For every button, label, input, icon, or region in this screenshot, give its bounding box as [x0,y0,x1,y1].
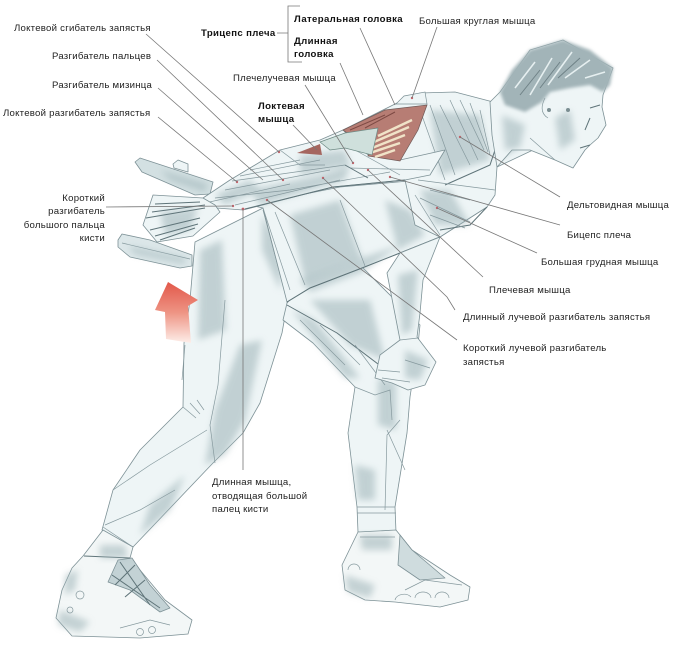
hand gripping dumbbell [143,195,220,242]
labels: right side: запястья [463,357,505,368]
labels: left side: Локтевой разгибатель запястья [3,108,150,119]
labels: top centre: мышца [258,114,295,125]
labels: left side: Локтевой сгибатель запястья [14,23,151,34]
raised arm and forearm [203,130,445,210]
rear shoe [56,530,192,638]
labels: left side: Короткий [62,193,105,204]
rear leg [102,208,290,547]
labels: triceps group: Длинная [294,36,338,47]
labels: right side: Плечевая мышца [489,285,571,296]
labels: left side: большого пальца [24,220,105,231]
front shoe [342,530,470,607]
labels: top centre: Локтевая [258,101,305,112]
supporting arm and hand [375,237,440,390]
labels: triceps group: головка [294,49,334,60]
triceps muscle highlighted in red [297,105,427,161]
labels: top centre [233,16,536,125]
labels: top centre: Большая круглая мышца [419,16,536,27]
icon: lower dumbbell plate [118,234,192,268]
labels: right side: Длинный лучевой разгибатель запястья [463,312,650,323]
label: long abductor of thumb: Длинная мышца, [212,477,291,488]
labels: right side: Большая грудная мышца [541,257,659,268]
labels: triceps group [201,14,403,60]
labels: left side: разгибатель [48,206,105,217]
labels: right side: Короткий лучевой разгибатель [463,343,607,354]
small red muscle markers [232,97,461,210]
labels: top centre: Плечелучевая мышца [233,73,336,84]
labels: right side [463,200,669,368]
labels: left side: кисти [80,233,105,244]
labels: right side: Бицепс плеча [567,230,632,241]
leader lines [106,6,560,470]
labels: left side: Разгибатель пальцев [52,51,151,62]
labels: left side [3,23,153,244]
label: long abductor of thumb: палец кисти [212,504,268,515]
front leg [283,245,420,532]
neck and head [490,40,613,168]
labels: left side: Разгибатель мизинца [52,80,153,91]
icon: upper dumbbell plate [135,158,213,195]
teres major muscle [396,92,427,104]
label: long abductor of thumb [212,477,307,515]
labels: right side: Дельтовидная мышца [567,200,669,211]
torso [250,165,497,302]
back, shoulder and chest [343,92,533,237]
arrow: upward movement direction [155,282,198,343]
labels: triceps group: Трицепс плеча [201,28,276,39]
labels: triceps group: Латеральная головка [294,14,403,25]
figure: athlete performing dumbbell kickback [56,40,613,638]
label: long abductor of thumb: отводящая большой [212,491,307,502]
